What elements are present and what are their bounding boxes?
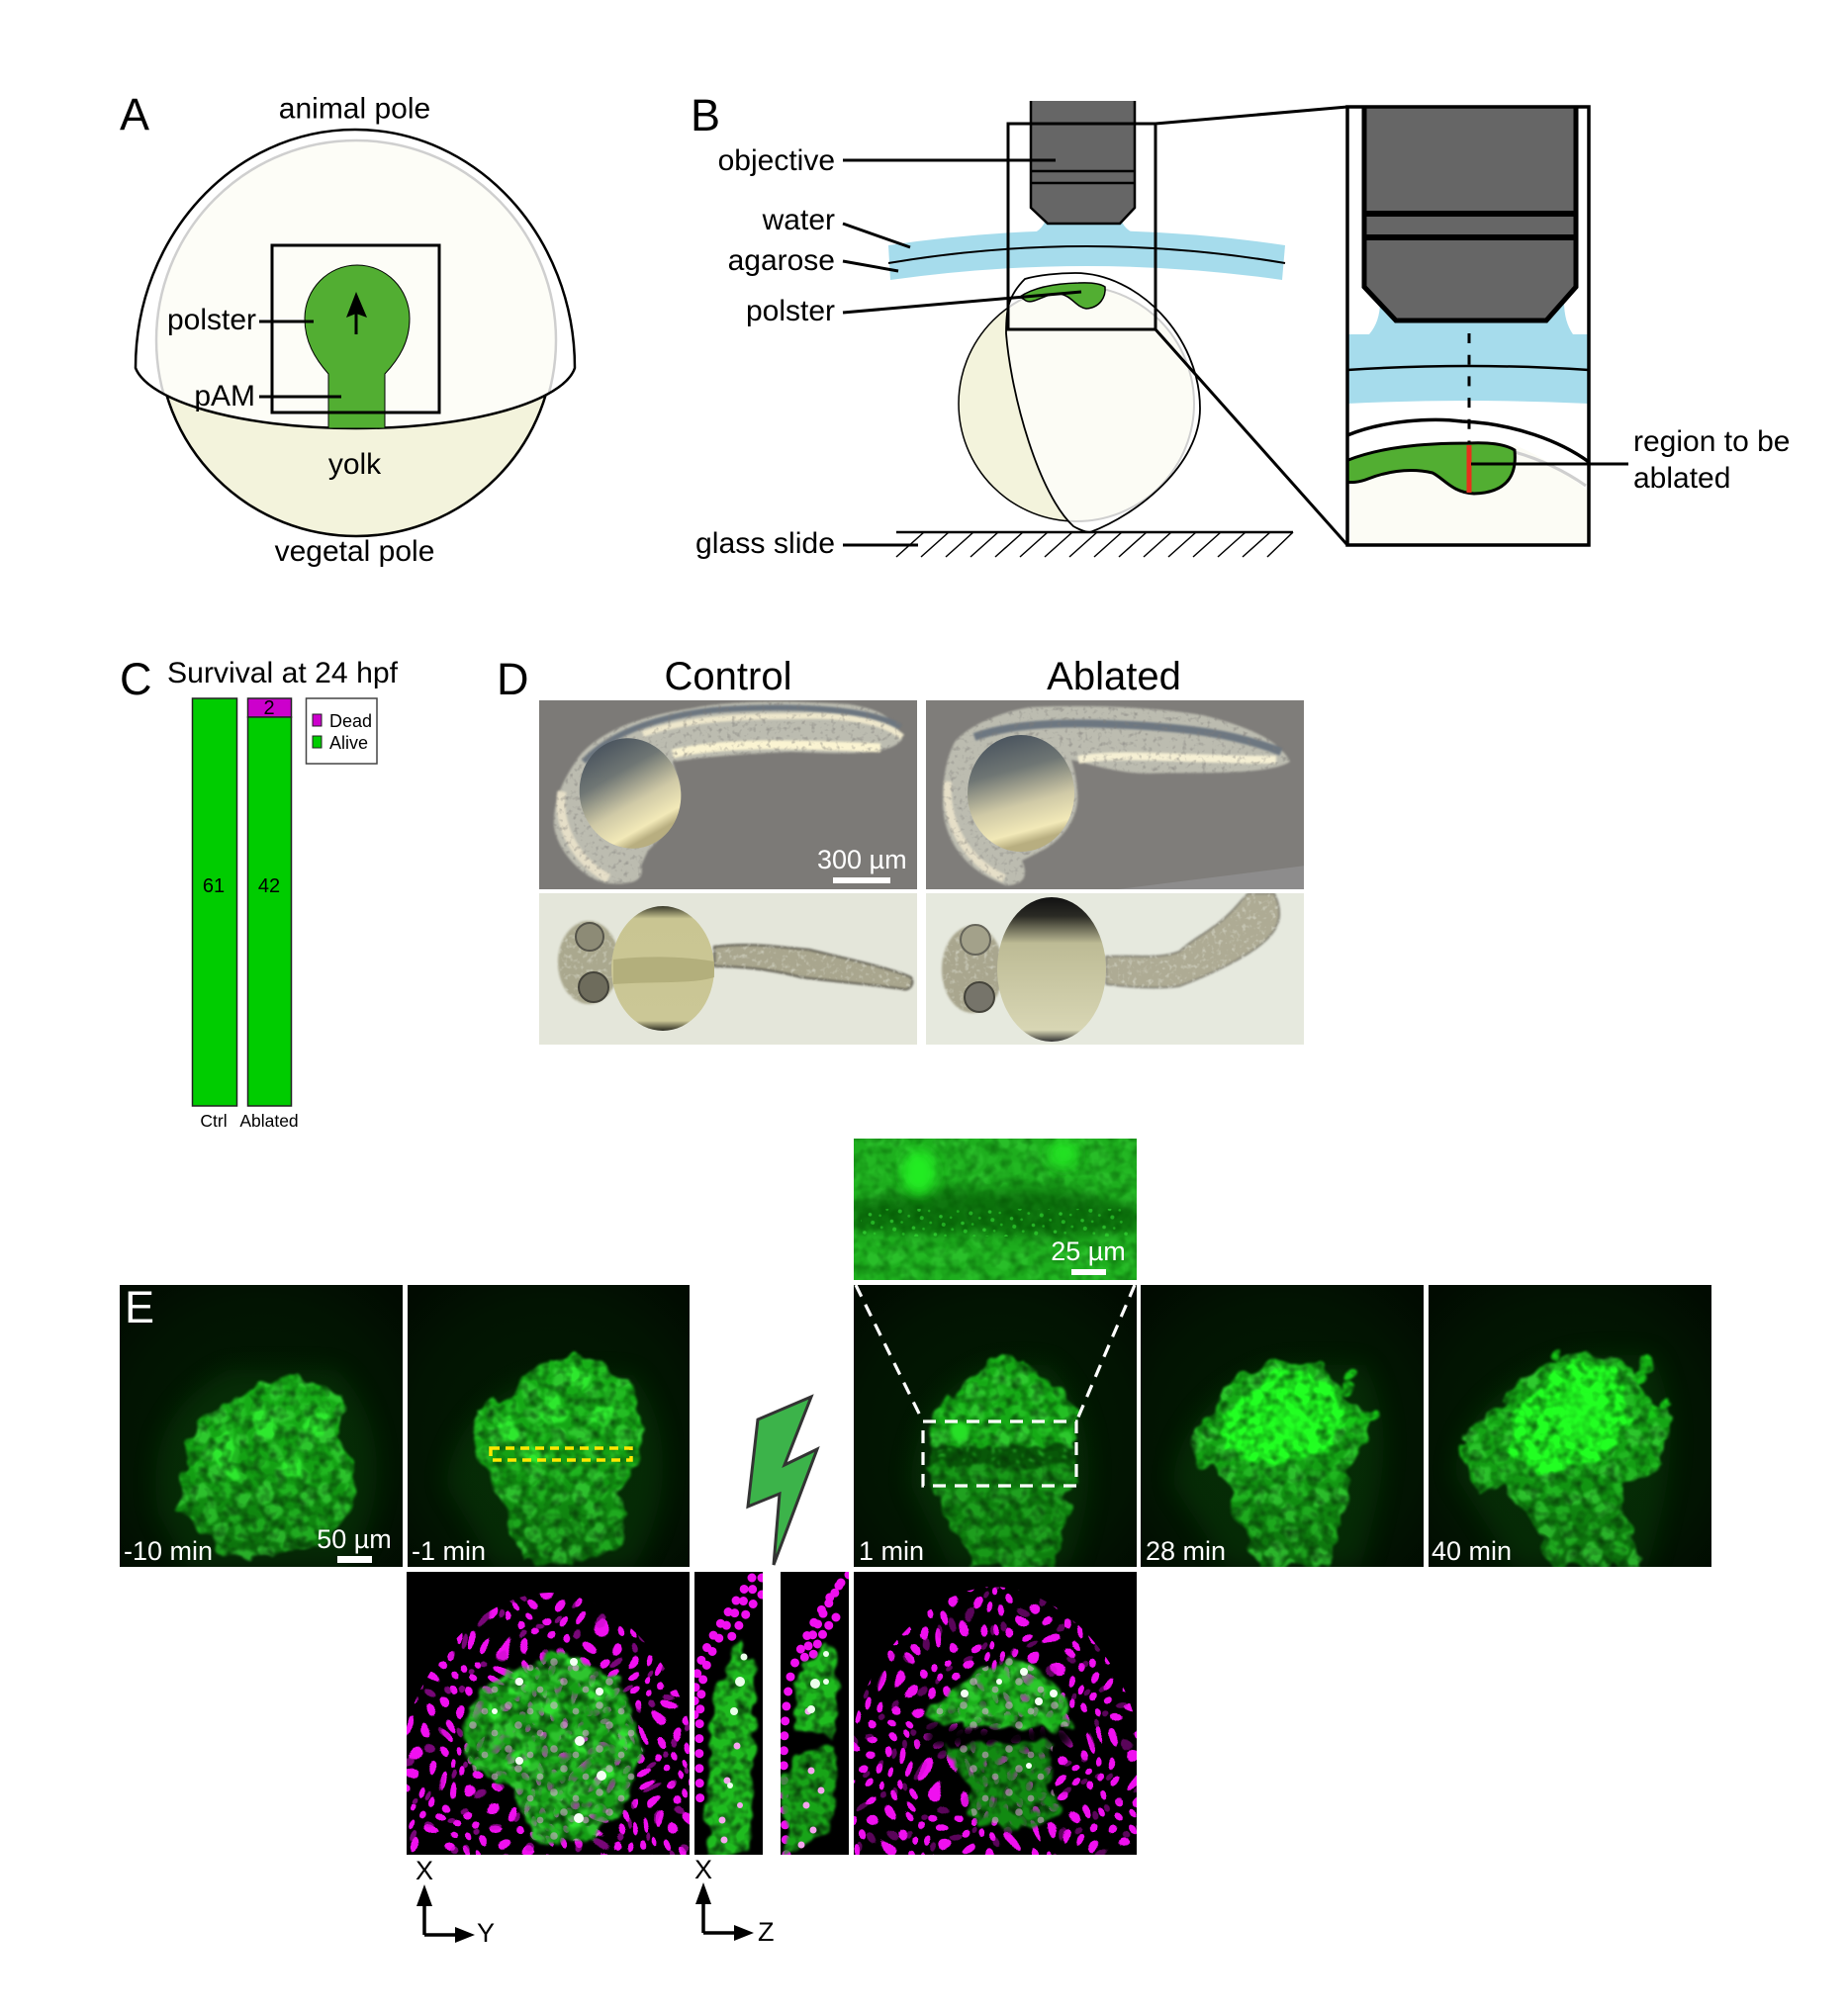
time label: 40 min: 40 min (1432, 1536, 1512, 1566)
label: pAM: pAM (194, 380, 255, 412)
region box (272, 245, 439, 412)
column title: Ablated: Ablated (1047, 655, 1181, 698)
micrograph: 40 min (1429, 1285, 1711, 1567)
panel letter E: E (125, 1282, 154, 1332)
bar values (203, 697, 280, 897)
micrograph: 1 min (854, 1285, 1137, 1567)
zoom box and connector lines (1008, 107, 1347, 545)
label: agarose: agarose (728, 244, 835, 277)
bar values: 42 (258, 875, 280, 897)
category labels (200, 1111, 299, 1131)
label: glass slide: glass slide (695, 527, 835, 560)
icon: laser lightning bolt (748, 1397, 817, 1565)
axes: X-Z: Z (758, 1917, 774, 1947)
label: water: water (762, 204, 835, 236)
category labels: Ctrl (200, 1111, 228, 1131)
axes: X-Z (694, 1855, 774, 1947)
micrograph: -10 min (120, 1285, 403, 1567)
label: polster: polster (746, 295, 835, 327)
panel B: imaging setup schematic (691, 90, 1790, 560)
legend: Dead (329, 711, 372, 731)
micrograph: zoomed ablated region (854, 1139, 1137, 1280)
scale bar: 25 um: 25 µm (1051, 1236, 1126, 1266)
leader line: region to be ablated (1471, 463, 1628, 465)
bar values: 61 (203, 875, 225, 897)
bar: control (192, 698, 237, 1106)
axes: X-Y: X (416, 1856, 433, 1885)
objective (1031, 101, 1135, 224)
photo: control lateral (539, 700, 917, 889)
heading: D: D (497, 654, 528, 704)
heading: C: C (120, 654, 152, 704)
heading: B: B (691, 90, 720, 140)
label: vegetal pole: vegetal pole (275, 535, 434, 568)
magnified inset (1343, 99, 1593, 545)
chart title: Survival at 24 hpf (167, 657, 399, 689)
bar: ablated (247, 698, 291, 1106)
micrograph: 28 min (1141, 1285, 1424, 1567)
legend (307, 698, 377, 764)
label: yolk: yolk (328, 448, 382, 481)
label: objective: objective (718, 144, 835, 177)
scale bar: 300 um: 300 µm (817, 845, 907, 874)
water and agarose band (888, 210, 1285, 280)
time label: 1 min: 1 min (859, 1536, 924, 1566)
bar values: 2 (263, 697, 275, 719)
category labels: Ablated (239, 1111, 299, 1131)
micrograph: -1 min (408, 1285, 690, 1567)
embryo (959, 273, 1200, 532)
micrograph: side view after (781, 1572, 849, 1858)
label: region to be ablated: region to be (1633, 425, 1790, 458)
panel C: survival bar chart (120, 654, 399, 1131)
white dashed zoom region (856, 1285, 1135, 1486)
micrograph: side view before (694, 1572, 763, 1855)
label: region to be ablated: ablated (1633, 462, 1730, 495)
yolk (158, 140, 554, 536)
time label: -1 min: -1 min (412, 1536, 486, 1566)
panel E: time-lapse micrographs (120, 1123, 1711, 1948)
panel A: embryo schematic (120, 89, 575, 568)
leader lines (843, 160, 1081, 545)
micrograph: nuclei before ablation (407, 1572, 690, 1855)
heading: A: A (120, 89, 149, 139)
axes: X-Z: X (694, 1855, 712, 1884)
column title: Control: Control (665, 655, 791, 698)
leader lines (259, 321, 341, 397)
polster and pAM shape (305, 265, 410, 428)
scale bar: 50 um: 50 µm (317, 1524, 392, 1554)
photo: ablated lateral (926, 700, 1306, 889)
axes: X-Y: Y (477, 1918, 495, 1948)
label: polster: polster (167, 304, 256, 336)
arrow (346, 292, 367, 334)
photo: ablated dorsal (926, 893, 1304, 1045)
photo: control dorsal (539, 893, 917, 1045)
legend: Alive (329, 733, 368, 753)
blastoderm dome (135, 129, 576, 429)
micrograph: nuclei after ablation (854, 1572, 1137, 1855)
axes: X-Y (416, 1856, 495, 1948)
yellow dashed ablation target (491, 1448, 631, 1460)
label: animal pole: animal pole (279, 93, 430, 125)
time label: 28 min: 28 min (1146, 1536, 1226, 1566)
panel D: embryo photographs (497, 654, 1306, 1045)
glass slide (896, 532, 1293, 557)
time label: -10 min: -10 min (124, 1536, 213, 1566)
